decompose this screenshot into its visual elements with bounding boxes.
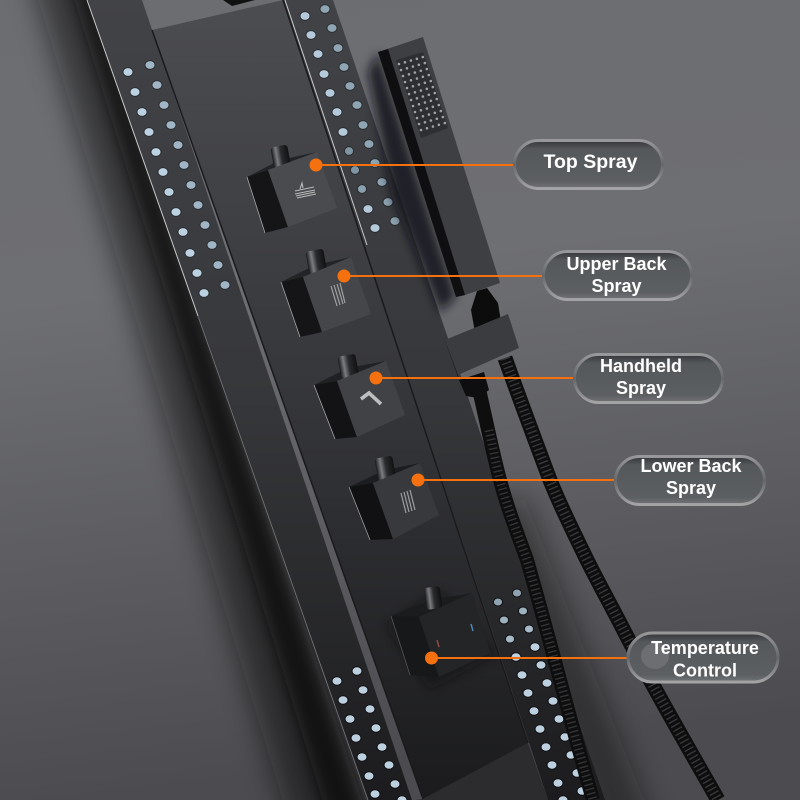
icon: handheld — [361, 393, 381, 404]
left rail — [87, 0, 412, 800]
callout: lower back spray: Lower Back — [640, 456, 743, 476]
knob: top spray — [247, 145, 337, 233]
lower left rail nozzles — [332, 667, 407, 800]
back hose — [505, 358, 718, 800]
knob: handheld spray — [314, 354, 405, 439]
icon: back jets — [331, 283, 345, 306]
callout: top spray: Top Spray — [544, 151, 638, 173]
lower right rail nozzles — [493, 589, 587, 800]
right rail — [283, 0, 605, 800]
callout: temperature control — [425, 633, 778, 682]
callout: lower back spray: Spray — [666, 478, 716, 498]
callout: upper back spray: Spray — [591, 276, 642, 296]
callout: top spray — [310, 140, 662, 188]
knob: temperature control — [385, 586, 495, 690]
red mark — [437, 640, 439, 647]
handheld shower head — [368, 37, 500, 312]
upper left rail nozzles — [123, 61, 230, 297]
callout: handheld spray: Spray — [616, 378, 666, 398]
icon: back jets — [401, 490, 415, 513]
front hose — [478, 385, 593, 800]
knob: upper back spray — [281, 249, 371, 337]
callout: lower back spray — [412, 456, 764, 504]
top fitting stub — [223, 0, 255, 6]
blue mark — [471, 624, 473, 631]
wall gap below center panel — [415, 743, 548, 800]
callout: upper back spray — [338, 252, 692, 300]
shadow of panel on wall — [20, 0, 660, 800]
callout: handheld spray: Handheld — [600, 356, 682, 376]
upper right rail nozzles — [300, 5, 400, 232]
callout: upper back spray: Upper Back — [566, 254, 668, 274]
callout: handheld spray — [370, 354, 722, 402]
icon: shower head — [295, 183, 316, 198]
callout: temperature control: Control — [673, 660, 737, 680]
hose connector and holder — [445, 288, 519, 398]
callout: temperature control: Temperature — [651, 638, 759, 658]
knob: lower back spray — [349, 456, 439, 540]
center panel — [152, 0, 528, 799]
